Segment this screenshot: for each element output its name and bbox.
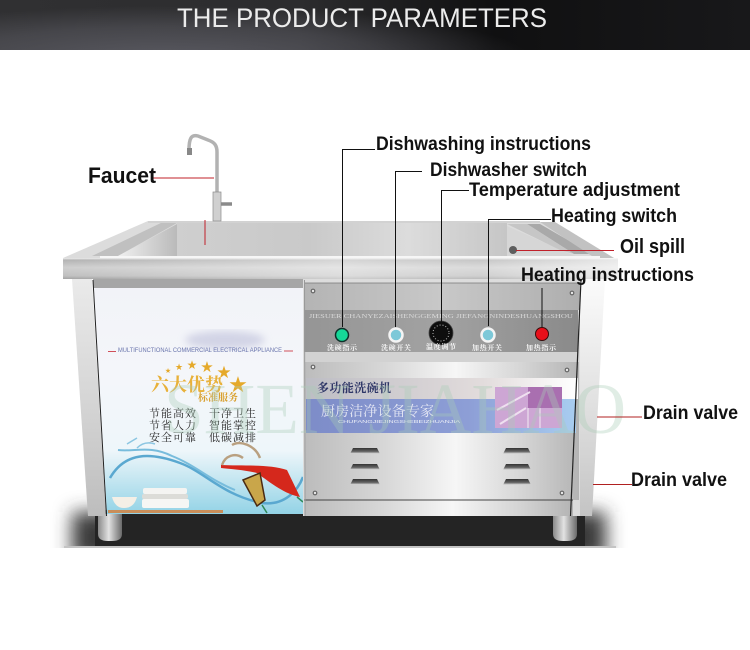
- floor shadow: [64, 510, 616, 562]
- water splash: [110, 438, 303, 503]
- top plate: [304, 283, 580, 310]
- faucet: [187, 136, 232, 221]
- blue band: [306, 378, 578, 433]
- artwork features: 智能掌控: [209, 418, 256, 432]
- left post: [72, 279, 106, 516]
- control plate: [304, 310, 578, 352]
- callout: Dishwashing instructions: [342, 134, 591, 327]
- sink basin: [63, 221, 614, 258]
- callout: Dishwashing instructions: Dishwashing instructions: [376, 134, 591, 155]
- control captions: [327, 342, 557, 352]
- callout: Faucet: Faucet: [88, 163, 157, 188]
- band slogan: 厨房洁净设备专家: [321, 403, 434, 420]
- callout: Heating switch: [488, 206, 677, 326]
- dishwasher machine: [63, 221, 626, 562]
- control captions: 加热指示: [526, 343, 557, 352]
- band pinyin: CHUFANGJIEJINGSHEBEIZHUANJIA: [338, 419, 460, 424]
- band heading: 多功能洗碗机: [317, 380, 391, 395]
- right control panel: [303, 279, 581, 516]
- stars: ★: [200, 358, 214, 376]
- stars: ★: [228, 373, 248, 398]
- callout: Heating switch: Heating switch: [551, 206, 677, 227]
- switch: heating: [482, 328, 494, 342]
- callout: Temperature adjustment: [442, 180, 681, 322]
- band photo collage: [495, 387, 562, 428]
- left door panel artwork: 标准服务: [198, 391, 238, 404]
- callout: Dishwasher switch: [396, 160, 587, 327]
- front lip: [63, 258, 618, 279]
- callout: Dishwasher switch: Dishwasher switch: [430, 160, 587, 181]
- callout: Drain valve upper: Drain valve: [643, 403, 738, 424]
- knob: temperature: [429, 321, 453, 345]
- callout: Heating instructions: Heating instructions: [521, 265, 694, 286]
- artwork features: [149, 406, 256, 444]
- callout: Oil spill: Oil spill: [620, 236, 685, 258]
- indicator: heating: [536, 328, 548, 340]
- artwork heading: 六大优势: [151, 375, 223, 395]
- callout: Drain valve lower: [593, 470, 727, 491]
- control captions: 温度调节: [426, 342, 456, 351]
- artwork features: 安全可靠: [149, 430, 196, 444]
- callout: Faucet: [88, 163, 214, 245]
- header banner: [0, 0, 750, 50]
- vents right: [503, 448, 531, 485]
- artwork features: 低碳减排: [209, 430, 256, 444]
- title: THE PRODUCT PARAMETERS: [177, 3, 547, 33]
- plates: [108, 488, 223, 513]
- stars: ★: [216, 363, 232, 383]
- control captions: 洗碗指示: [327, 343, 358, 352]
- callout: Temperature adjustment: Temperature adjustment: [469, 180, 681, 201]
- control plate lettering: JIESUER CHANYEZAISHENGGEMING JIEFANGNINDESHUANGSHOU: [309, 313, 573, 320]
- stars: [165, 358, 248, 398]
- lower front panel: [304, 352, 579, 500]
- left door panel artwork: [93, 279, 305, 516]
- bottom plate: [305, 500, 573, 516]
- screws: [311, 289, 574, 495]
- control captions: 加热开关: [472, 343, 502, 352]
- wine glasses: [221, 443, 303, 513]
- control captions: 洗碗开关: [381, 343, 411, 352]
- artwork subtitle: MULTIFUNCTIONAL COMMERCIAL ELECTRICAL APPLIANCE: [118, 348, 282, 354]
- stars: ★: [175, 363, 183, 373]
- artwork features: 干净卫生: [209, 406, 256, 420]
- stars: ★: [165, 367, 171, 375]
- vents left: [350, 448, 380, 485]
- right post: [570, 279, 605, 516]
- artwork features: 节能高效: [149, 406, 196, 420]
- stars: ★: [187, 358, 197, 372]
- watermark: SHEN JIAHAO: [164, 369, 626, 449]
- indicator: dishwashing: [336, 328, 348, 342]
- legs: [98, 514, 577, 541]
- callout: Drain valve lower: Drain valve: [631, 470, 727, 491]
- switch: dishwasher: [390, 328, 402, 342]
- artwork features: 节省人力: [149, 418, 196, 432]
